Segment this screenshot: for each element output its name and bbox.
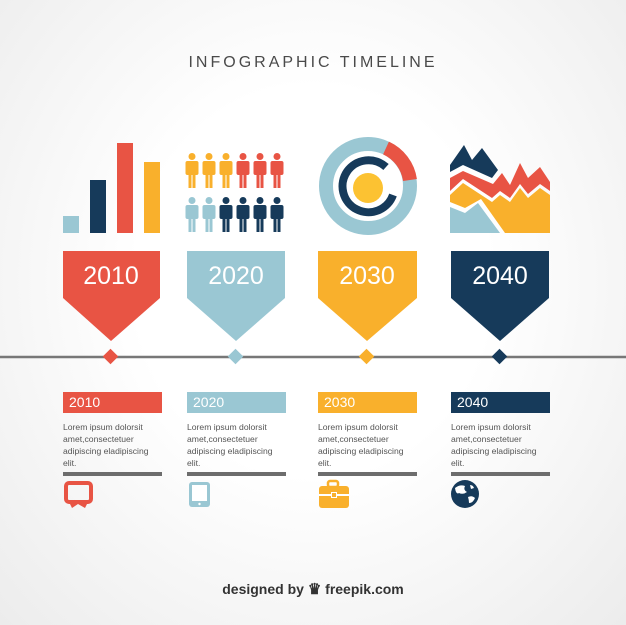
marker 2020 [187,251,285,364]
icon: tablet [189,482,210,507]
chart: bars [63,143,160,233]
column 2030 text [318,392,417,476]
column 2020 text: Lorem ipsum dolorsit amet,consectetuer adipiscing eladipiscing elit. [187,422,273,468]
column 2020 text [187,392,286,476]
marker 2010: 2010 [83,262,139,290]
column 2030 text: 2030 [324,394,355,410]
column 2030 text: Lorem ipsum dolorsit amet,consectetuer adipiscing eladipiscing elit. [318,422,404,468]
title: INFOGRAPHIC TIMELINE [188,54,438,71]
column 2010 text: 2010 [69,394,100,410]
marker 2040: 2040 [472,262,528,290]
column 2040 text: Lorem ipsum dolorsit amet,consectetuer adipiscing eladipiscing elit. [451,422,537,468]
column 2010 text: Lorem ipsum dolorsit amet,consectetuer adipiscing eladipiscing elit. [63,422,149,468]
column 2040 text [451,392,550,476]
marker 2010 [63,251,160,364]
column 2040 text: 2040 [457,394,488,410]
timeline line [0,356,626,358]
marker 2030: 2030 [339,262,395,290]
marker 2040 [451,251,549,364]
chart: area mountains [450,145,550,233]
icon: presentation board [66,483,91,508]
column 2010 text [63,392,162,476]
column 2020 text: 2020 [193,394,224,410]
chart: donut [326,144,410,228]
chart: people [186,153,284,232]
footer credit: designed by ♛ freepik.com [222,581,404,598]
icon: globe [451,480,479,508]
icon: briefcase [319,481,349,508]
marker 2030 [318,251,417,364]
marker 2020: 2020 [208,262,264,290]
